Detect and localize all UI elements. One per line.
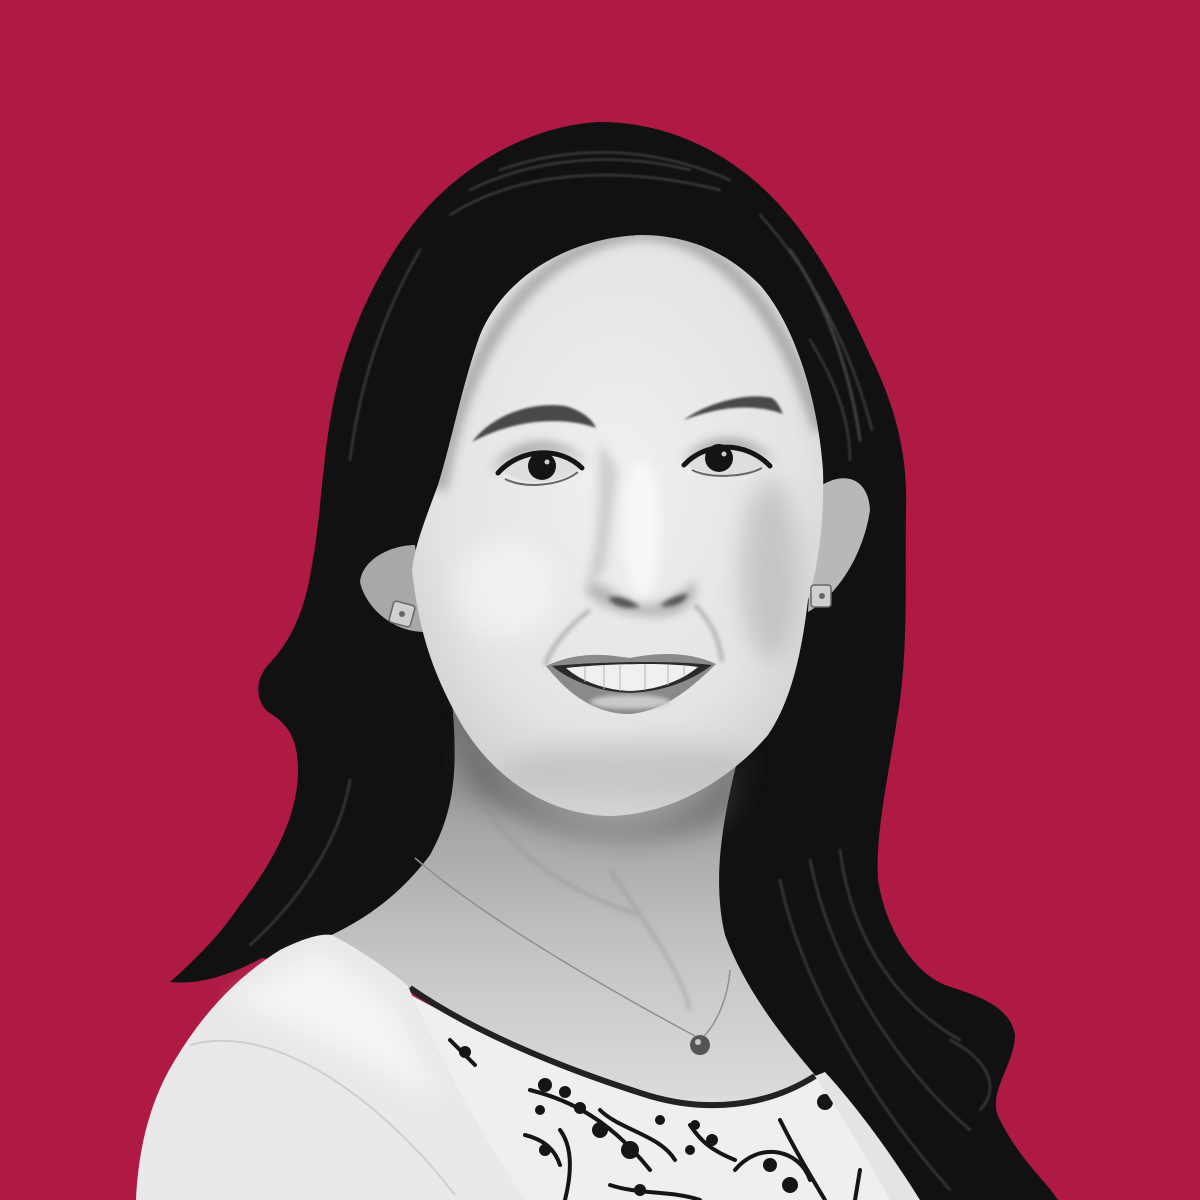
floral pattern	[450, 1040, 860, 1200]
portrait illustration	[136, 122, 1058, 1200]
mouth	[546, 654, 716, 714]
smile folds	[545, 610, 590, 665]
left earring	[389, 601, 415, 627]
face	[412, 233, 823, 816]
necklace	[415, 858, 730, 1055]
right eye	[682, 438, 777, 476]
left ear	[360, 545, 425, 632]
nose	[585, 580, 696, 616]
hair	[170, 122, 1058, 1200]
right sweater	[815, 1072, 920, 1200]
right ear	[808, 478, 870, 612]
floral blossoms	[459, 1046, 833, 1196]
right earring	[811, 585, 831, 607]
neck tendon lines	[480, 800, 690, 1010]
forehead hair shadow	[440, 233, 820, 490]
nose and cheek shading	[585, 440, 618, 590]
neck and chest	[325, 700, 815, 1103]
left eye	[490, 441, 592, 485]
right eyebrow	[684, 396, 783, 420]
left sweater	[136, 935, 525, 1200]
blouse neckline trim	[410, 988, 815, 1105]
neck shadow under jaw	[458, 720, 750, 840]
left eyebrow	[472, 405, 596, 442]
hair highlights	[250, 152, 990, 1190]
blouse	[395, 986, 905, 1200]
